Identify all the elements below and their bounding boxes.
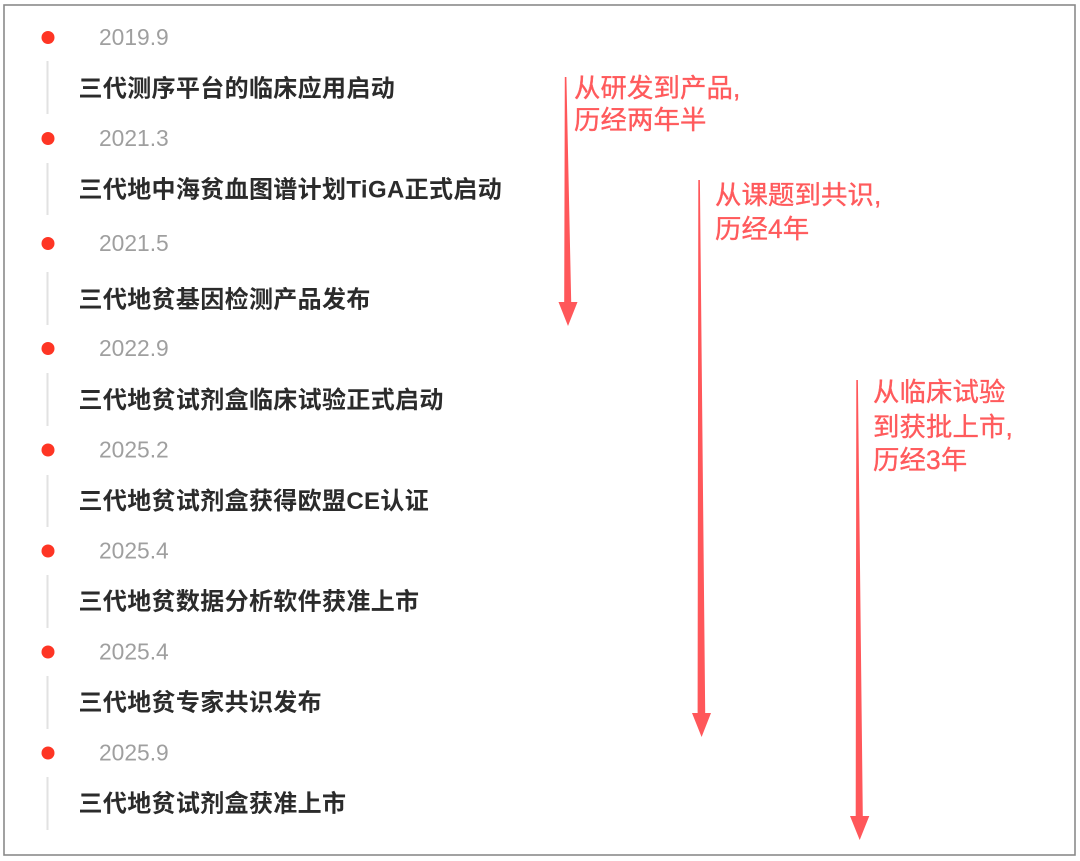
arrow: clinical trial to approval: [850, 380, 869, 840]
callout: research topic to consensus: 从课题到共识,: [715, 180, 881, 210]
callout: clinical trial to approval: 从临床试验: [873, 377, 1005, 407]
event: 2025.2: [42, 436, 429, 527]
event: 2025.9: 2025.9: [99, 740, 169, 766]
event: 2025.2: 三代地贫试剂盒获得欧盟CE认证: [78, 487, 429, 515]
event: 2025.4 consensus: 三代地贫专家共识发布: [78, 690, 322, 716]
event: 2022.9: 三代地贫试剂盒临床试验正式启动: [78, 386, 444, 414]
event: 2021.5: [42, 230, 371, 325]
event: 2025.4 software: [42, 538, 419, 628]
callout: R&D to product: 从研发到产品,: [574, 73, 740, 103]
event: 2022.9: 2022.9: [99, 335, 169, 361]
arrow: R&D to product: [558, 77, 578, 326]
callout: clinical trial to approval: 历经3年: [873, 445, 967, 475]
event: 2019.9: 2019.9: [99, 24, 169, 50]
event: 2019.9: [42, 24, 395, 114]
event: 2025.9: [42, 740, 346, 830]
event: 2021.3: 2021.3: [99, 125, 169, 151]
event: 2022.9: [42, 335, 444, 426]
event: 2025.4 consensus: [42, 638, 322, 729]
callout: clinical trial to approval: 到获批上市,: [873, 412, 1013, 442]
event: 2021.5: 2021.5: [99, 230, 169, 256]
event: 2021.5: 三代地贫基因检测产品发布: [78, 286, 371, 314]
event: 2021.3: [42, 125, 502, 215]
event: 2025.2: 2025.2: [99, 436, 169, 462]
callout: R&D to product: 历经两年半: [574, 105, 706, 135]
event: 2025.9: 三代地贫试剂盒获准上市: [78, 790, 346, 818]
arrow: research topic to consensus: [692, 180, 711, 737]
event: 2025.4 software: 2025.4: [99, 538, 169, 564]
event: 2019.9: 三代测序平台的临床应用启动: [78, 74, 395, 102]
callout: research topic to consensus: 历经4年: [715, 214, 809, 244]
timeline: [42, 24, 502, 830]
event: 2025.4 consensus: 2025.4: [99, 638, 169, 664]
event: 2021.3: 三代地中海贫血图谱计划TiGA正式启动: [78, 176, 502, 204]
event: 2025.4 software: 三代地贫数据分析软件获准上市: [78, 588, 419, 616]
